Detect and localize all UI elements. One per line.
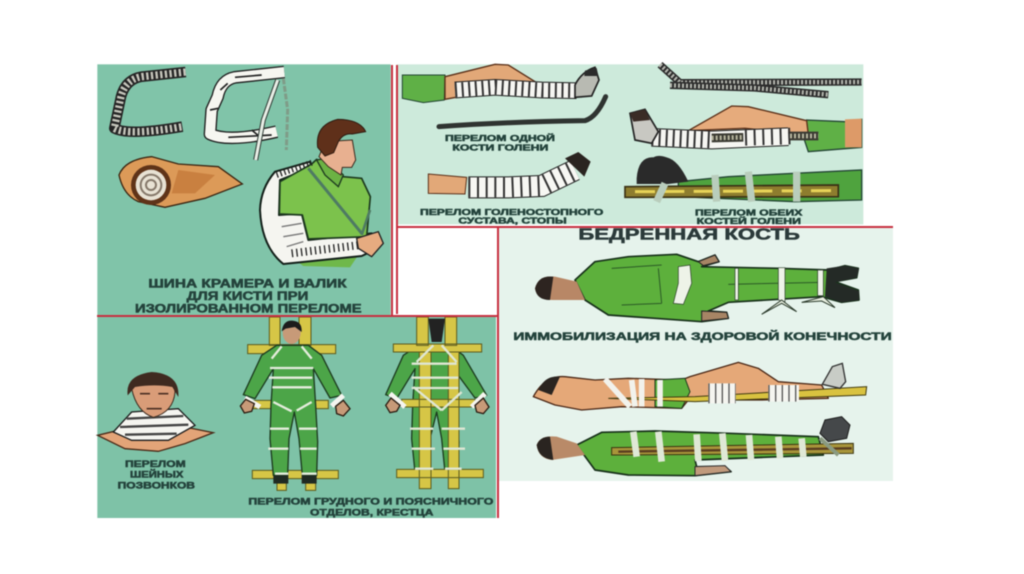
icon: bandaged ankle <box>428 152 591 194</box>
caption: one shin bone: КОСТИ ГОЛЕНИ <box>452 142 548 152</box>
icon: body on board, back view <box>386 317 489 489</box>
caption: Cramer splint: ДЛЯ КИСТИ ПРИ <box>187 289 308 303</box>
caption: both shin bones <box>695 208 803 226</box>
panel background <box>97 317 496 518</box>
icon: figure bound to healthy limb <box>535 254 859 322</box>
icon: hand with roller <box>119 157 242 207</box>
panel: femur immobilisation <box>499 226 893 481</box>
icon: upper right splints <box>660 65 862 95</box>
icon: bare Cramer splint <box>114 72 186 132</box>
icon: bent leg with bandage and splint <box>630 106 862 152</box>
caption: healthy limb: ИММОБИЛИЗАЦИЯ НА ЗДОРОВОЙ КОНЕЧНОСТИ <box>513 330 892 343</box>
caption: cervical vertebrae <box>118 459 196 491</box>
caption: Cramer splint: ШИНА КРАМЕРА И ВАЛИК <box>148 276 348 290</box>
caption: thoracic, lumbar, sacrum <box>248 496 493 517</box>
caption: ankle and foot <box>420 207 604 225</box>
icon: body on board, front view <box>240 317 350 490</box>
caption: Cramer splint: ИЗОЛИРОВАННОМ ПЕРЕЛОМЕ <box>135 302 362 316</box>
panel: cervical, thoracic and lumbar fractures <box>97 317 496 518</box>
caption: cervical vertebrae: ПЕРЕЛОМ <box>125 459 186 469</box>
heading: femur: БЕДРЕННАЯ КОСТЬ <box>578 226 800 243</box>
icon: figure with long splint, bare torso <box>533 362 867 410</box>
caption: one shin bone: ПЕРЕЛОМ ОДНОЙ <box>445 132 555 143</box>
caption: ankle and foot: ПЕРЕЛОМ ГОЛЕНОСТОПНОГО <box>420 207 604 217</box>
caption: both shin bones: ПЕРЕЛОМ ОБЕИХ <box>695 208 803 218</box>
caption: Cramer splint <box>135 276 362 316</box>
caption: one shin bone <box>445 132 555 152</box>
panel: lower leg fractures <box>397 64 863 226</box>
icon: head with neck bandage <box>98 372 213 451</box>
icon: wrapped splint with ties <box>210 72 288 160</box>
caption: ankle and foot: СУСТАВА, СТОПЫ <box>458 215 567 225</box>
icon: long dark splint <box>439 97 606 127</box>
panel background <box>499 227 893 481</box>
icon: both shin bones, board splint <box>625 156 862 202</box>
panel background <box>397 64 863 224</box>
panel background <box>97 64 391 315</box>
caption: thoracic, lumbar, sacrum: ПЕРЕЛОМ ГРУДНОГО И ПОЯСНИЧНОГО <box>248 496 493 506</box>
caption: cervical vertebrae: ШЕЙНЫХ <box>130 469 183 480</box>
caption: both shin bones: КОСТЕЙ ГОЛЕНИ <box>697 215 801 226</box>
icon: man with arm splint <box>260 119 383 267</box>
icon: figure with long splint, clothed <box>537 417 853 476</box>
red divider lines <box>97 65 893 518</box>
icon: splinted leg, one shin bone <box>402 64 599 103</box>
caption: thoracic, lumbar, sacrum: ОТДЕЛОВ, КРЕСТЦА <box>310 507 434 517</box>
caption: cervical vertebrae: ПОЗВОНКОВ <box>118 481 196 491</box>
panel: Cramer splint for the hand <box>97 64 391 316</box>
